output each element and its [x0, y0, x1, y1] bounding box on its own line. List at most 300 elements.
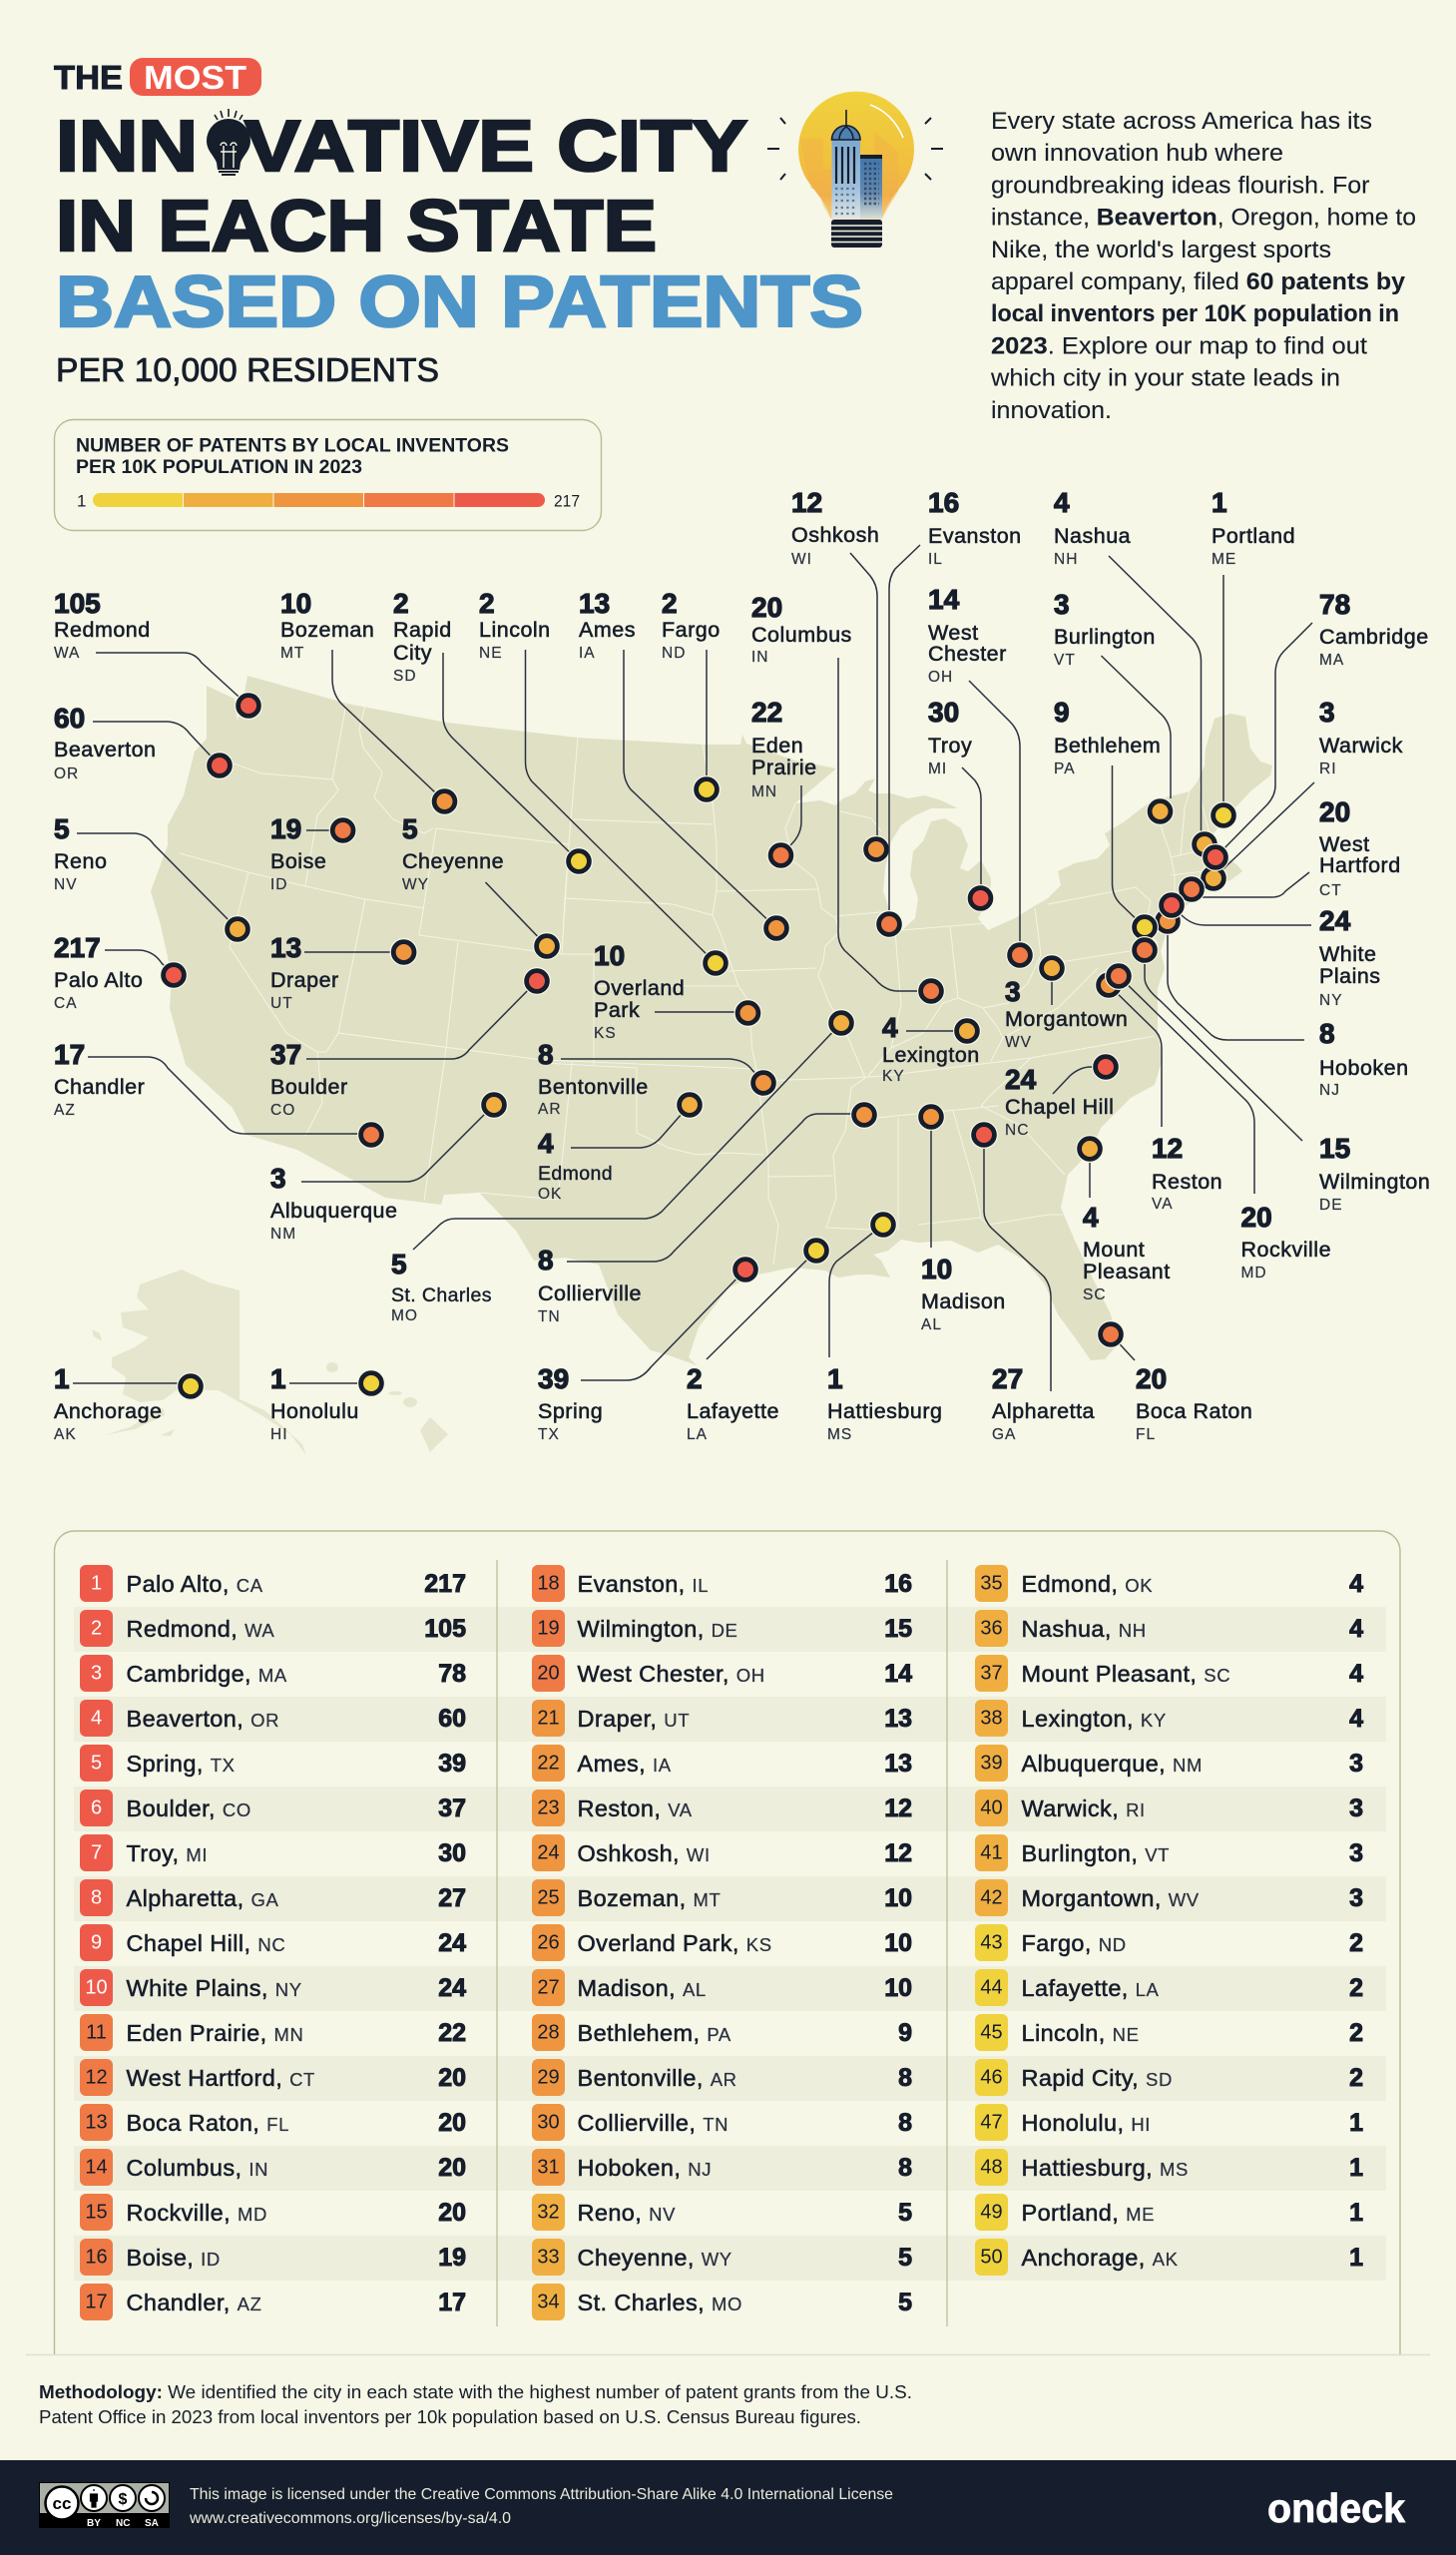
callout: West Chester: 14: [928, 584, 960, 615]
callout: Lafayette: Lafayette: [687, 1399, 779, 1423]
ranking column 3: 39: [980, 1753, 1003, 1775]
ranking column 2: West Chester, OH: [577, 1661, 765, 1687]
ranking column 2: 5: [898, 2244, 912, 2272]
callout: Chapel Hill: 24: [1005, 1064, 1037, 1095]
callout: White Plains: Plains: [1319, 964, 1381, 988]
callout: Madison: [918, 1104, 1006, 1333]
ranking column 3: 47: [980, 2112, 1003, 2134]
ranking column 3: 40: [980, 1796, 1003, 1818]
ranking column 3: 46: [980, 2066, 1003, 2088]
callout: Troy: 30: [928, 697, 959, 728]
callout: Warwick: Warwick: [1319, 734, 1403, 758]
callout: Bethlehem: 9: [1054, 697, 1070, 728]
ranking column 2: 20: [537, 1663, 560, 1685]
ranking column 1: 60: [438, 1705, 466, 1733]
callout: Evanston: 16: [928, 487, 959, 518]
callout: Madison: AL: [921, 1316, 942, 1333]
ranking column 3: 1: [1349, 2244, 1363, 2272]
ranking column 3: 3: [1349, 1750, 1363, 1778]
callout: Nashua: [1054, 487, 1217, 857]
callout: Redmond: Redmond: [54, 618, 151, 642]
callout: Bentonville: 8: [538, 1039, 554, 1070]
ranking column 1: 217: [424, 1570, 466, 1598]
callout: Collierville: TN: [538, 1308, 561, 1325]
callout: Chandler: AZ: [54, 1102, 76, 1119]
ranking column 1: 10: [85, 1976, 108, 1998]
callout: Edmond: OK: [538, 1186, 562, 1203]
ranking column 1: 4: [91, 1707, 102, 1729]
callout: Boulder: 37: [270, 1039, 301, 1070]
callout: Chapel Hill: NC: [1005, 1122, 1029, 1139]
callout: Hoboken: NJ: [1319, 1082, 1340, 1099]
map: Hawaii: [326, 1362, 448, 1452]
callout: Edmond: 4: [538, 1128, 554, 1159]
ranking column 2: 25: [537, 1886, 560, 1908]
ranking column 1: 20: [438, 2199, 466, 2227]
callout: Collierville: Collierville: [538, 1281, 642, 1305]
ranking column 2: 5: [898, 2199, 912, 2227]
ranking column 2: Evanston, IL: [577, 1571, 709, 1597]
callout: Redmond: 105: [54, 588, 101, 619]
ranking column 1: 16: [85, 2246, 108, 2268]
ranking column 1: 20: [438, 2109, 466, 2137]
callout: Oshkosh: WI: [791, 551, 812, 568]
callout: Boulder: [270, 968, 550, 1119]
ranking column 3: 1: [1349, 2199, 1363, 2227]
ranking column 1: 14: [85, 2156, 108, 2178]
ranking column 2: 34: [537, 2292, 560, 2313]
ranking column 2: 29: [537, 2066, 560, 2088]
ranking column 2: Hoboken, NJ: [577, 2155, 712, 2181]
ranking column 2: 10: [884, 1884, 912, 1912]
ranking column 1: 11: [86, 2022, 107, 2044]
title: in each state: IN EACH STATE: [56, 187, 657, 266]
callout: Rapid City: Rapid: [393, 618, 452, 642]
callout: Evanston: Evanston: [928, 524, 1022, 548]
callout: Cambridge: MA: [1319, 652, 1344, 669]
callout: Morgantown: WV: [1005, 1034, 1032, 1051]
callout: Madison: Madison: [921, 1289, 1006, 1313]
icon: creative commons badge: $: [119, 2491, 128, 2508]
ranking column 1: 1: [91, 1573, 102, 1595]
intro paragraph: Nike, the world's largest sports: [991, 237, 1331, 263]
ranking column 2: St. Charles, MO: [577, 2290, 742, 2315]
callout: Draper: UT: [270, 995, 293, 1012]
callout: Evanston: [876, 487, 1022, 937]
callout: Rapid City: [393, 588, 592, 874]
methodology note: Methodology: We identified the city in each state with the highest number of patent grants from the U.S.: [39, 2382, 912, 2402]
ranking column 3: 3: [1349, 1839, 1363, 1867]
ranking column 3: 50: [980, 2246, 1003, 2268]
callout: Rockville: 20: [1241, 1202, 1272, 1233]
ondeck logo: ondeck: [1267, 2485, 1405, 2531]
ranking column 2: 16: [884, 1570, 912, 1598]
callout: Lincoln: Lincoln: [479, 618, 551, 642]
ranking column 3: [975, 1565, 1363, 2276]
callout: Ames: Ames: [579, 618, 636, 642]
callout: Alpharetta: GA: [992, 1426, 1016, 1443]
callout: Chandler: Chandler: [54, 1075, 145, 1099]
callout: St. Charles: [391, 1010, 854, 1324]
callout: St. Charles: St. Charles: [391, 1284, 492, 1306]
callout: Redmond: WA: [54, 645, 80, 662]
callout: Spring: TX: [538, 1426, 560, 1443]
ranking column 2: 32: [537, 2202, 560, 2224]
ranking table panel: [54, 1531, 1400, 2354]
callout: Cambridge: 78: [1319, 589, 1350, 620]
ranking column 2: 27: [537, 1976, 560, 1998]
callout: Rapid City: SD: [393, 668, 417, 685]
callout: Rapid City: 2: [393, 588, 409, 619]
callout: Cheyenne: WY: [402, 876, 429, 893]
icon: creative commons badge: NC: [116, 2518, 130, 2529]
ranking column 2: 24: [537, 1842, 560, 1864]
callout: White Plains: White: [1319, 942, 1376, 966]
callout: Bentonville: [538, 1039, 776, 1118]
ranking column 1: 15: [85, 2202, 108, 2224]
callout: Lexington: Lexington: [882, 1043, 980, 1067]
callout: Nashua: Nashua: [1054, 524, 1131, 548]
callout: West Hartford: West: [1319, 832, 1370, 856]
callout: Reston: Reston: [1152, 1170, 1222, 1194]
ranking column 2: 26: [537, 1932, 560, 1954]
ranking column 3: 1: [1349, 2109, 1363, 2137]
ranking column 1: 3: [91, 1663, 102, 1685]
intro paragraph: 2023. Explore our map to find out: [991, 332, 1367, 359]
callout: Bozeman: Bozeman: [280, 618, 374, 642]
callout: Rockville: MD: [1241, 1265, 1267, 1281]
callout: Boca Raton: Boca Raton: [1136, 1399, 1252, 1423]
ranking column 3: 2: [1349, 2019, 1363, 2047]
ranking column 3: 45: [980, 2022, 1003, 2044]
callout: Ames: [579, 588, 789, 941]
callout: West Hartford: CT: [1319, 882, 1342, 899]
callout: Eden Prairie: Eden: [751, 734, 803, 758]
legend colour scale: [77, 491, 580, 511]
ranking column 1: Chandler, AZ: [126, 2290, 261, 2315]
ranking column 1: Eden Prairie, MN: [126, 2020, 303, 2046]
callout: Hattiesburg: [827, 1212, 942, 1443]
callout: Hoboken: 8: [1319, 1018, 1335, 1049]
callout: Albuquerque: 3: [270, 1163, 286, 1194]
ranking column 1: 24: [438, 1974, 466, 2002]
ranking column 3: 38: [980, 1707, 1003, 1729]
callout: Palo Alto: [54, 932, 187, 1012]
callout: Anchorage: Anchorage: [54, 1399, 162, 1423]
icon: creative commons badge: [39, 2482, 170, 2529]
callout: Bozeman: [280, 588, 458, 814]
callout: Reno: Reno: [54, 849, 107, 873]
ranking column 1: 5: [91, 1753, 102, 1775]
ranking column 2: Madison, AL: [577, 1975, 707, 2001]
callout: Cheyenne: [402, 813, 560, 959]
ranking column 2: Bethlehem, PA: [577, 2020, 731, 2046]
ranking column 1: Boca Raton, FL: [126, 2110, 289, 2136]
callout: Lafayette: 2: [687, 1363, 703, 1394]
ranking column 2: 18: [537, 1573, 560, 1595]
ranking column 1: 30: [438, 1839, 466, 1867]
callout: Bethlehem: [1054, 697, 1161, 940]
callout: Burlington: VT: [1054, 652, 1076, 669]
ranking column 3: Nashua, NH: [1022, 1616, 1147, 1642]
ranking column 3: Albuquerque, NM: [1022, 1751, 1203, 1777]
ranking column 1: Spring, TX: [126, 1751, 236, 1777]
callout: Nashua: 4: [1054, 487, 1070, 518]
icon: bulb in title: [207, 109, 250, 176]
ranking column 3: Rapid City, SD: [1022, 2065, 1173, 2091]
ranking column 2: Reston, VA: [577, 1795, 693, 1821]
ranking column 1: Redmond, WA: [126, 1616, 274, 1642]
callout: Mount Pleasant: SC: [1083, 1286, 1107, 1303]
callout: Draper: 13: [270, 932, 301, 963]
ranking column 3: 3: [1349, 1884, 1363, 1912]
callout: Spring: Spring: [538, 1399, 603, 1423]
callout: West Chester: OH: [928, 669, 953, 686]
callout: Oshkosh: Oshkosh: [791, 523, 879, 547]
callout: Reno: 5: [54, 813, 70, 844]
ranking column 2: 23: [537, 1796, 560, 1818]
ranking column 3: 4: [1349, 1705, 1363, 1733]
license text: www.creativecommons.org/licenses/by-sa/4.0: [189, 2510, 511, 2527]
ranking column 3: Lafayette, LA: [1022, 1975, 1160, 2001]
callout: Hattiesburg: Hattiesburg: [827, 1399, 942, 1423]
callout: Boulder: CO: [270, 1102, 295, 1119]
ranking column 2: Overland Park, KS: [577, 1930, 772, 1956]
callout: Evanston: IL: [928, 551, 943, 568]
callout: Hattiesburg: 1: [827, 1363, 843, 1394]
callout: Portland: [1211, 487, 1295, 828]
callout: Alpharetta: Alpharetta: [992, 1399, 1095, 1423]
ranking column 1: Alpharetta, GA: [126, 1885, 278, 1911]
callout: Reno: [54, 813, 250, 942]
ranking column 1: [80, 1565, 466, 2320]
callout: Columbus: Columbus: [751, 623, 852, 647]
callout: Honolulu: Honolulu: [270, 1399, 359, 1423]
icon: light bulb with skyscrapers: [767, 92, 943, 248]
callout: Troy: [928, 697, 994, 911]
ranking column 3: 2: [1349, 1929, 1363, 1957]
callout: Warwick: [1201, 697, 1403, 891]
callout: Overland Park: 10: [594, 940, 625, 971]
callout: Honolulu: [270, 1363, 384, 1443]
ranking column 2: Bozeman, MT: [577, 1885, 721, 1911]
ranking column 3: 2: [1349, 1974, 1363, 2002]
map: contiguous United States: [151, 676, 1272, 1365]
callout: Fargo: Fargo: [662, 618, 721, 642]
ranking column 1: 7: [91, 1842, 102, 1864]
map: Alaska: [92, 1270, 306, 1455]
ranking column 3: 42: [980, 1886, 1003, 1908]
callout: Overland Park: KS: [594, 1025, 617, 1042]
ranking column 1: Cambridge, MA: [126, 1661, 287, 1687]
icon: creative commons badge: cc: [53, 2494, 71, 2513]
callout: Spring: [538, 1257, 758, 1443]
title: innovative city: [56, 107, 747, 187]
callout: Columbus: 20: [751, 592, 782, 623]
ranking column 3: 43: [980, 1932, 1003, 1954]
callout: Lexington: [882, 1012, 980, 1085]
callout: Mount Pleasant: Mount: [1083, 1238, 1145, 1262]
callout: West Chester: Chester: [928, 642, 1007, 666]
callout: Collierville: 8: [538, 1245, 554, 1276]
ranking column 2: 19: [537, 1617, 560, 1639]
ranking column 1: 2: [91, 1617, 102, 1639]
callout: Portland: 1: [1212, 487, 1227, 518]
callout: Troy: Troy: [928, 734, 972, 758]
callout: Anchorage: AK: [54, 1426, 77, 1443]
callout: Reston: 12: [1152, 1133, 1183, 1164]
callout: Mount Pleasant: 4: [1083, 1202, 1099, 1233]
ranking column 1: 20: [438, 2154, 466, 2182]
callout: Boca Raton: 20: [1136, 1363, 1167, 1394]
callout: West Hartford: [1179, 796, 1401, 902]
ranking column 1: 19: [438, 2244, 466, 2272]
ranking column 3: 48: [980, 2156, 1003, 2178]
ranking column 3: 3: [1349, 1794, 1363, 1822]
ranking column 3: 2: [1349, 2064, 1363, 2092]
callout: Bozeman: MT: [280, 645, 304, 662]
callout: Chandler: [54, 1039, 384, 1148]
intro paragraph: local inventors per 10K population in: [991, 300, 1399, 327]
callout: Cheyenne: 5: [402, 813, 418, 844]
ranking column 2: Wilmington, DE: [577, 1616, 738, 1642]
ranking column 1: 17: [438, 2289, 466, 2316]
ranking column 2: 28: [537, 2022, 560, 2044]
callout: Fargo: ND: [662, 645, 686, 662]
callout: Fargo: [662, 588, 721, 802]
callout: Burlington: Burlington: [1054, 625, 1156, 649]
callout: Morgantown: Morgantown: [1005, 1007, 1128, 1031]
callout: Overland Park: [594, 940, 761, 1042]
ranking column 1: 24: [438, 1929, 466, 1957]
callout: Boca Raton: [1098, 1321, 1252, 1443]
ranking column 2: Bentonville, AR: [577, 2065, 737, 2091]
ranking column 2: 31: [537, 2156, 560, 2178]
icon: creative commons badge: BY: [87, 2518, 101, 2529]
callout: Hoboken: Hoboken: [1319, 1056, 1409, 1080]
ranking column 2: Ames, IA: [577, 1751, 672, 1777]
ranking column 1: 6: [91, 1796, 102, 1818]
callout: Hoboken: [1155, 908, 1409, 1099]
callout: Edmond: [538, 1092, 703, 1203]
ranking column 3: Warwick, RI: [1022, 1795, 1146, 1821]
callout: Bentonville: AR: [538, 1101, 562, 1118]
ranking column 1: 78: [438, 1660, 466, 1688]
ranking column 3: Fargo, ND: [1022, 1930, 1127, 1956]
callout: Rockville: [1106, 963, 1331, 1281]
ranking column 1: Beaverton, OR: [126, 1706, 279, 1732]
callout: Reston: VA: [1152, 1196, 1174, 1213]
ranking column 2: 21: [537, 1707, 560, 1729]
callout: Draper: Draper: [270, 968, 339, 992]
callout: Eden Prairie: 22: [751, 697, 782, 728]
ranking column 1: 17: [85, 2292, 108, 2313]
callout: Albuquerque: NM: [270, 1226, 296, 1243]
callout: Warwick: 3: [1319, 697, 1335, 728]
callout: Palo Alto: CA: [54, 995, 78, 1012]
legend heading: [76, 435, 509, 478]
ranking column 1: 27: [438, 1884, 466, 1912]
callout: White Plains: NY: [1319, 992, 1343, 1009]
ranking column 3: Hattiesburg, MS: [1022, 2155, 1189, 2181]
intro paragraph: own innovation hub where: [991, 140, 1283, 167]
callout: Columbus: [751, 592, 944, 1004]
ranking column 2: 15: [884, 1615, 912, 1643]
callout: Bentonville: Bentonville: [538, 1075, 649, 1099]
ranking column 3: Lexington, KY: [1022, 1706, 1167, 1732]
callout: Cambridge: [1203, 589, 1429, 870]
callout: Beaverton: OR: [54, 766, 79, 782]
callout: West Hartford: 20: [1319, 796, 1350, 827]
ranking column 1: 105: [424, 1615, 466, 1643]
callout: Boca Raton: FL: [1136, 1426, 1156, 1443]
callout: Boise: 19: [270, 813, 301, 844]
ranking column 3: Morgantown, WV: [1022, 1885, 1200, 1911]
callout: Anchorage: 1: [54, 1363, 70, 1394]
callout: Collierville: [538, 1102, 877, 1325]
ranking column 2: 8: [898, 2064, 912, 2092]
callout: Albuquerque: Albuquerque: [270, 1199, 397, 1223]
ranking column 2: 9: [898, 2019, 912, 2047]
callout: Oshkosh: 12: [791, 487, 822, 518]
ranking column 3: Mount Pleasant, SC: [1022, 1661, 1230, 1687]
callout: Cheyenne: Cheyenne: [402, 849, 504, 873]
callout: Portland: Portland: [1212, 524, 1295, 548]
ranking column 3: Anchorage, AK: [1022, 2245, 1179, 2271]
legend colour scale: 1: [77, 491, 86, 511]
callout: Oshkosh: [791, 487, 889, 862]
callout: Burlington: [1054, 589, 1174, 824]
callout: Burlington: 3: [1054, 589, 1070, 620]
callout: Overland Park: Overland: [594, 976, 685, 1000]
ranking column 3: 41: [980, 1842, 1003, 1864]
callout: White Plains: [1159, 892, 1381, 1009]
table stripes: [74, 1607, 1386, 2281]
ranking column 3: Portland, ME: [1022, 2200, 1155, 2226]
callout: West Chester: [928, 584, 1033, 968]
callout: St. Charles: 5: [391, 1249, 407, 1279]
intro paragraph: instance, Beaverton, Oregon, home to: [991, 205, 1416, 232]
callout: Redmond: [54, 588, 261, 719]
ranking column 2: Oshkosh, WI: [577, 1840, 711, 1866]
callout: Boise: [270, 813, 356, 893]
title: the: THE: [54, 59, 123, 96]
callout: Alpharetta: [971, 1122, 1095, 1443]
callout: Overland Park: Park: [594, 998, 640, 1022]
title: based on patents: BASED ON PATENTS: [56, 262, 863, 342]
intro paragraph: groundbreaking ideas flourish. For: [991, 172, 1369, 199]
ranking column 2: Collierville, TN: [577, 2110, 728, 2136]
title block: [54, 58, 863, 388]
legend panel: [54, 419, 601, 531]
callout: Boulder: Boulder: [270, 1075, 348, 1099]
icon: creative commons badge: SA: [145, 2518, 159, 2529]
intro paragraph: [990, 108, 1416, 424]
ranking column 2: Reno, NV: [577, 2200, 676, 2226]
ranking column 3: 4: [1349, 1615, 1363, 1643]
subtitle: PER 10,000 RESIDENTS: [56, 351, 439, 388]
ranking column 1: 12: [85, 2066, 108, 2088]
license text: This image is licensed under the Creative Commons Attribution-Share Alike 4.0 International License: [190, 2486, 893, 2503]
callout: Spring: 39: [538, 1363, 569, 1394]
callout: Hattiesburg: MS: [827, 1426, 852, 1443]
ranking column 1: Boise, ID: [126, 2245, 221, 2271]
callout: Reno: NV: [54, 876, 78, 893]
ranking column 2: 12: [884, 1794, 912, 1822]
callout: St. Charles: MO: [391, 1307, 418, 1324]
callout: Wilmington: DE: [1319, 1197, 1343, 1214]
callout: Rockville: Rockville: [1241, 1238, 1331, 1262]
